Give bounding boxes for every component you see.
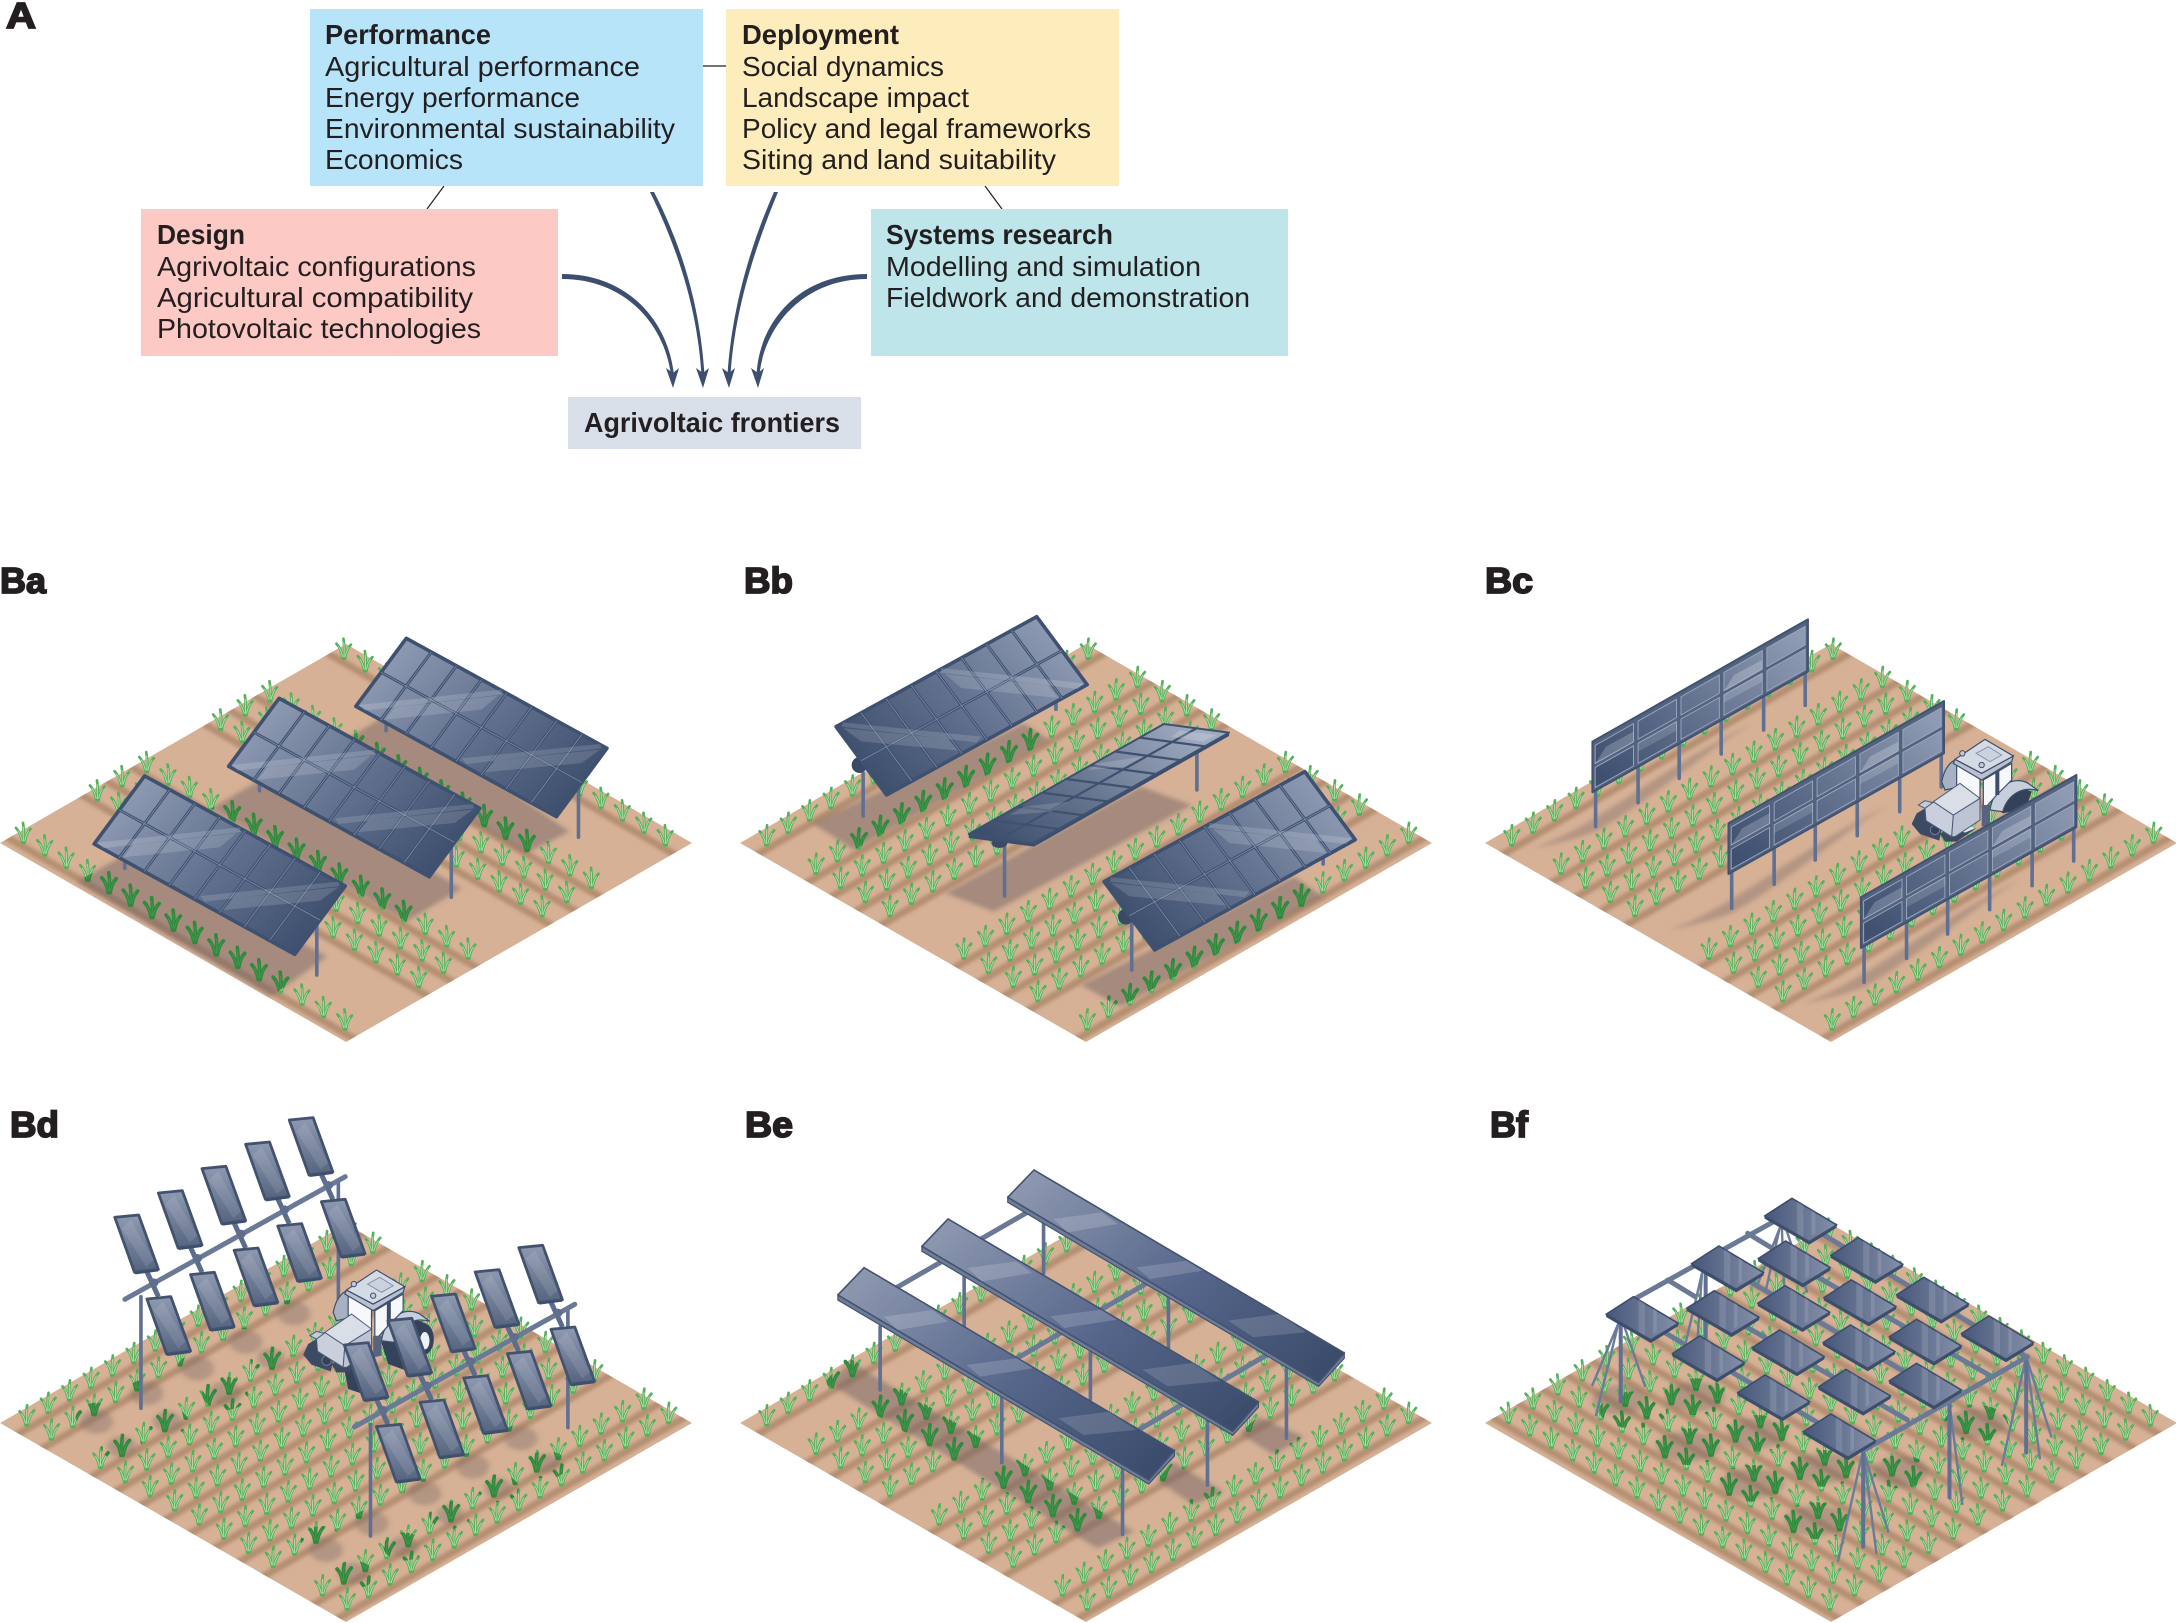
- overhead frame and modules Bf: [1592, 1198, 2051, 1561]
- arrow: systems research to frontiers: [751, 274, 867, 388]
- shaded crops Bf: [1599, 1378, 2008, 1539]
- tracker array back: [115, 1118, 365, 1408]
- box: Design: Agrivoltaic configurations: [157, 251, 476, 282]
- box: Deployment: Deployment: [742, 19, 899, 50]
- box: Deployment: Siting and land suitability: [742, 144, 1056, 175]
- arrow: deployment to frontiers: [722, 192, 778, 388]
- field Bb: [740, 644, 1432, 1042]
- shaded crops Bd: [76, 1300, 564, 1589]
- panel Bf: spaced overhead modules: [1465, 1198, 2176, 1623]
- panel Ba: tilted fixed rows: [0, 637, 710, 1060]
- label Bd: Bd: [10, 1104, 59, 1145]
- panel Bc: vertical bifacial fences with tractor: [1467, 619, 2176, 1060]
- tracker array front: [344, 1245, 595, 1536]
- tractor Bd: [303, 1270, 430, 1372]
- shadows Be: [829, 1362, 1304, 1548]
- box: Design: Design: [157, 219, 245, 250]
- crops Bf: [1501, 1219, 2157, 1610]
- panel Bb: trackers: [722, 617, 1452, 1060]
- box: Performance: Energy performance: [325, 82, 580, 113]
- box: Systems research: Systems research: [886, 219, 1113, 250]
- connector: deployment to systems research: [985, 186, 1002, 209]
- arrow: design to frontiers: [562, 274, 679, 388]
- connector: performance to design: [427, 186, 444, 209]
- vertical array front: [1861, 775, 2076, 982]
- box: Systems research: [871, 209, 1288, 356]
- solar rows Be: [838, 1170, 1344, 1534]
- box: Agrivoltaic frontiers: Agrivoltaic frontiers: [584, 407, 840, 438]
- field Bf: [1465, 1217, 2176, 1623]
- shaded crops Ba: [84, 732, 550, 992]
- box: Deployment: Social dynamics: [742, 51, 944, 82]
- label Be: Be: [745, 1104, 793, 1145]
- connector: performance to deployment: [703, 65, 726, 67]
- solar arrays Ba: [94, 638, 607, 975]
- box: Design: [141, 209, 558, 356]
- shadows Bc: [1533, 723, 2021, 1004]
- label Bb: Bb: [744, 560, 793, 601]
- crops Be: [760, 1219, 1416, 1610]
- box: Agrivoltaic frontiers: [568, 397, 861, 449]
- field Bd: [0, 1217, 712, 1623]
- field Be: [722, 1217, 1452, 1623]
- shadows Ba: [77, 710, 569, 997]
- field Bc: [1467, 637, 2176, 1060]
- shadows Bb: [813, 723, 1322, 1007]
- box: Systems research: Modelling and simulation: [886, 251, 1201, 282]
- box: Performance: Environmental sustainability: [325, 113, 675, 144]
- shadows Bf: [1592, 1382, 2006, 1536]
- box: Performance: Agricultural performance: [325, 51, 640, 82]
- crops Bb: [760, 639, 1416, 1030]
- box: Systems research: Fieldwork and demonstration: [886, 282, 1250, 313]
- crops Bc: [1505, 639, 2161, 1030]
- box: Deployment: Landscape impact: [742, 82, 969, 113]
- field Ba: [0, 637, 710, 1060]
- box: Design: Agricultural compatibility: [157, 282, 473, 313]
- tractor tracks Bd: [343, 1323, 434, 1394]
- box: Performance: Performance: [325, 19, 491, 50]
- shaded crops Be: [826, 1358, 1300, 1532]
- label Bc: Bc: [1485, 560, 1533, 601]
- shaded crops Bb: [838, 728, 1311, 1004]
- box: Deployment: [726, 9, 1119, 186]
- label Ba: Ba: [0, 560, 47, 601]
- box: Performance: Economics: [325, 144, 463, 175]
- box: Performance: [310, 9, 703, 186]
- crops Bd: [20, 1219, 676, 1610]
- crops Ba: [16, 639, 672, 1030]
- flat tracker panel: [969, 724, 1229, 847]
- panel Be: stilted long rows: [722, 1170, 1452, 1623]
- arrow: performance to frontiers: [650, 192, 709, 388]
- label Bf: Bf: [1490, 1104, 1529, 1145]
- vertical arrays back and middle: [1592, 619, 1944, 908]
- solar arrays Bb: [836, 617, 1355, 970]
- box: Design: Photovoltaic technologies: [157, 313, 481, 344]
- shadows Bd: [80, 1301, 560, 1584]
- panel Bd: elevated trackers with tractor: [0, 1118, 712, 1623]
- tractor Bc: [1912, 739, 2038, 842]
- concept diagram: [141, 9, 1288, 449]
- box: Deployment: Policy and legal frameworks: [742, 113, 1091, 144]
